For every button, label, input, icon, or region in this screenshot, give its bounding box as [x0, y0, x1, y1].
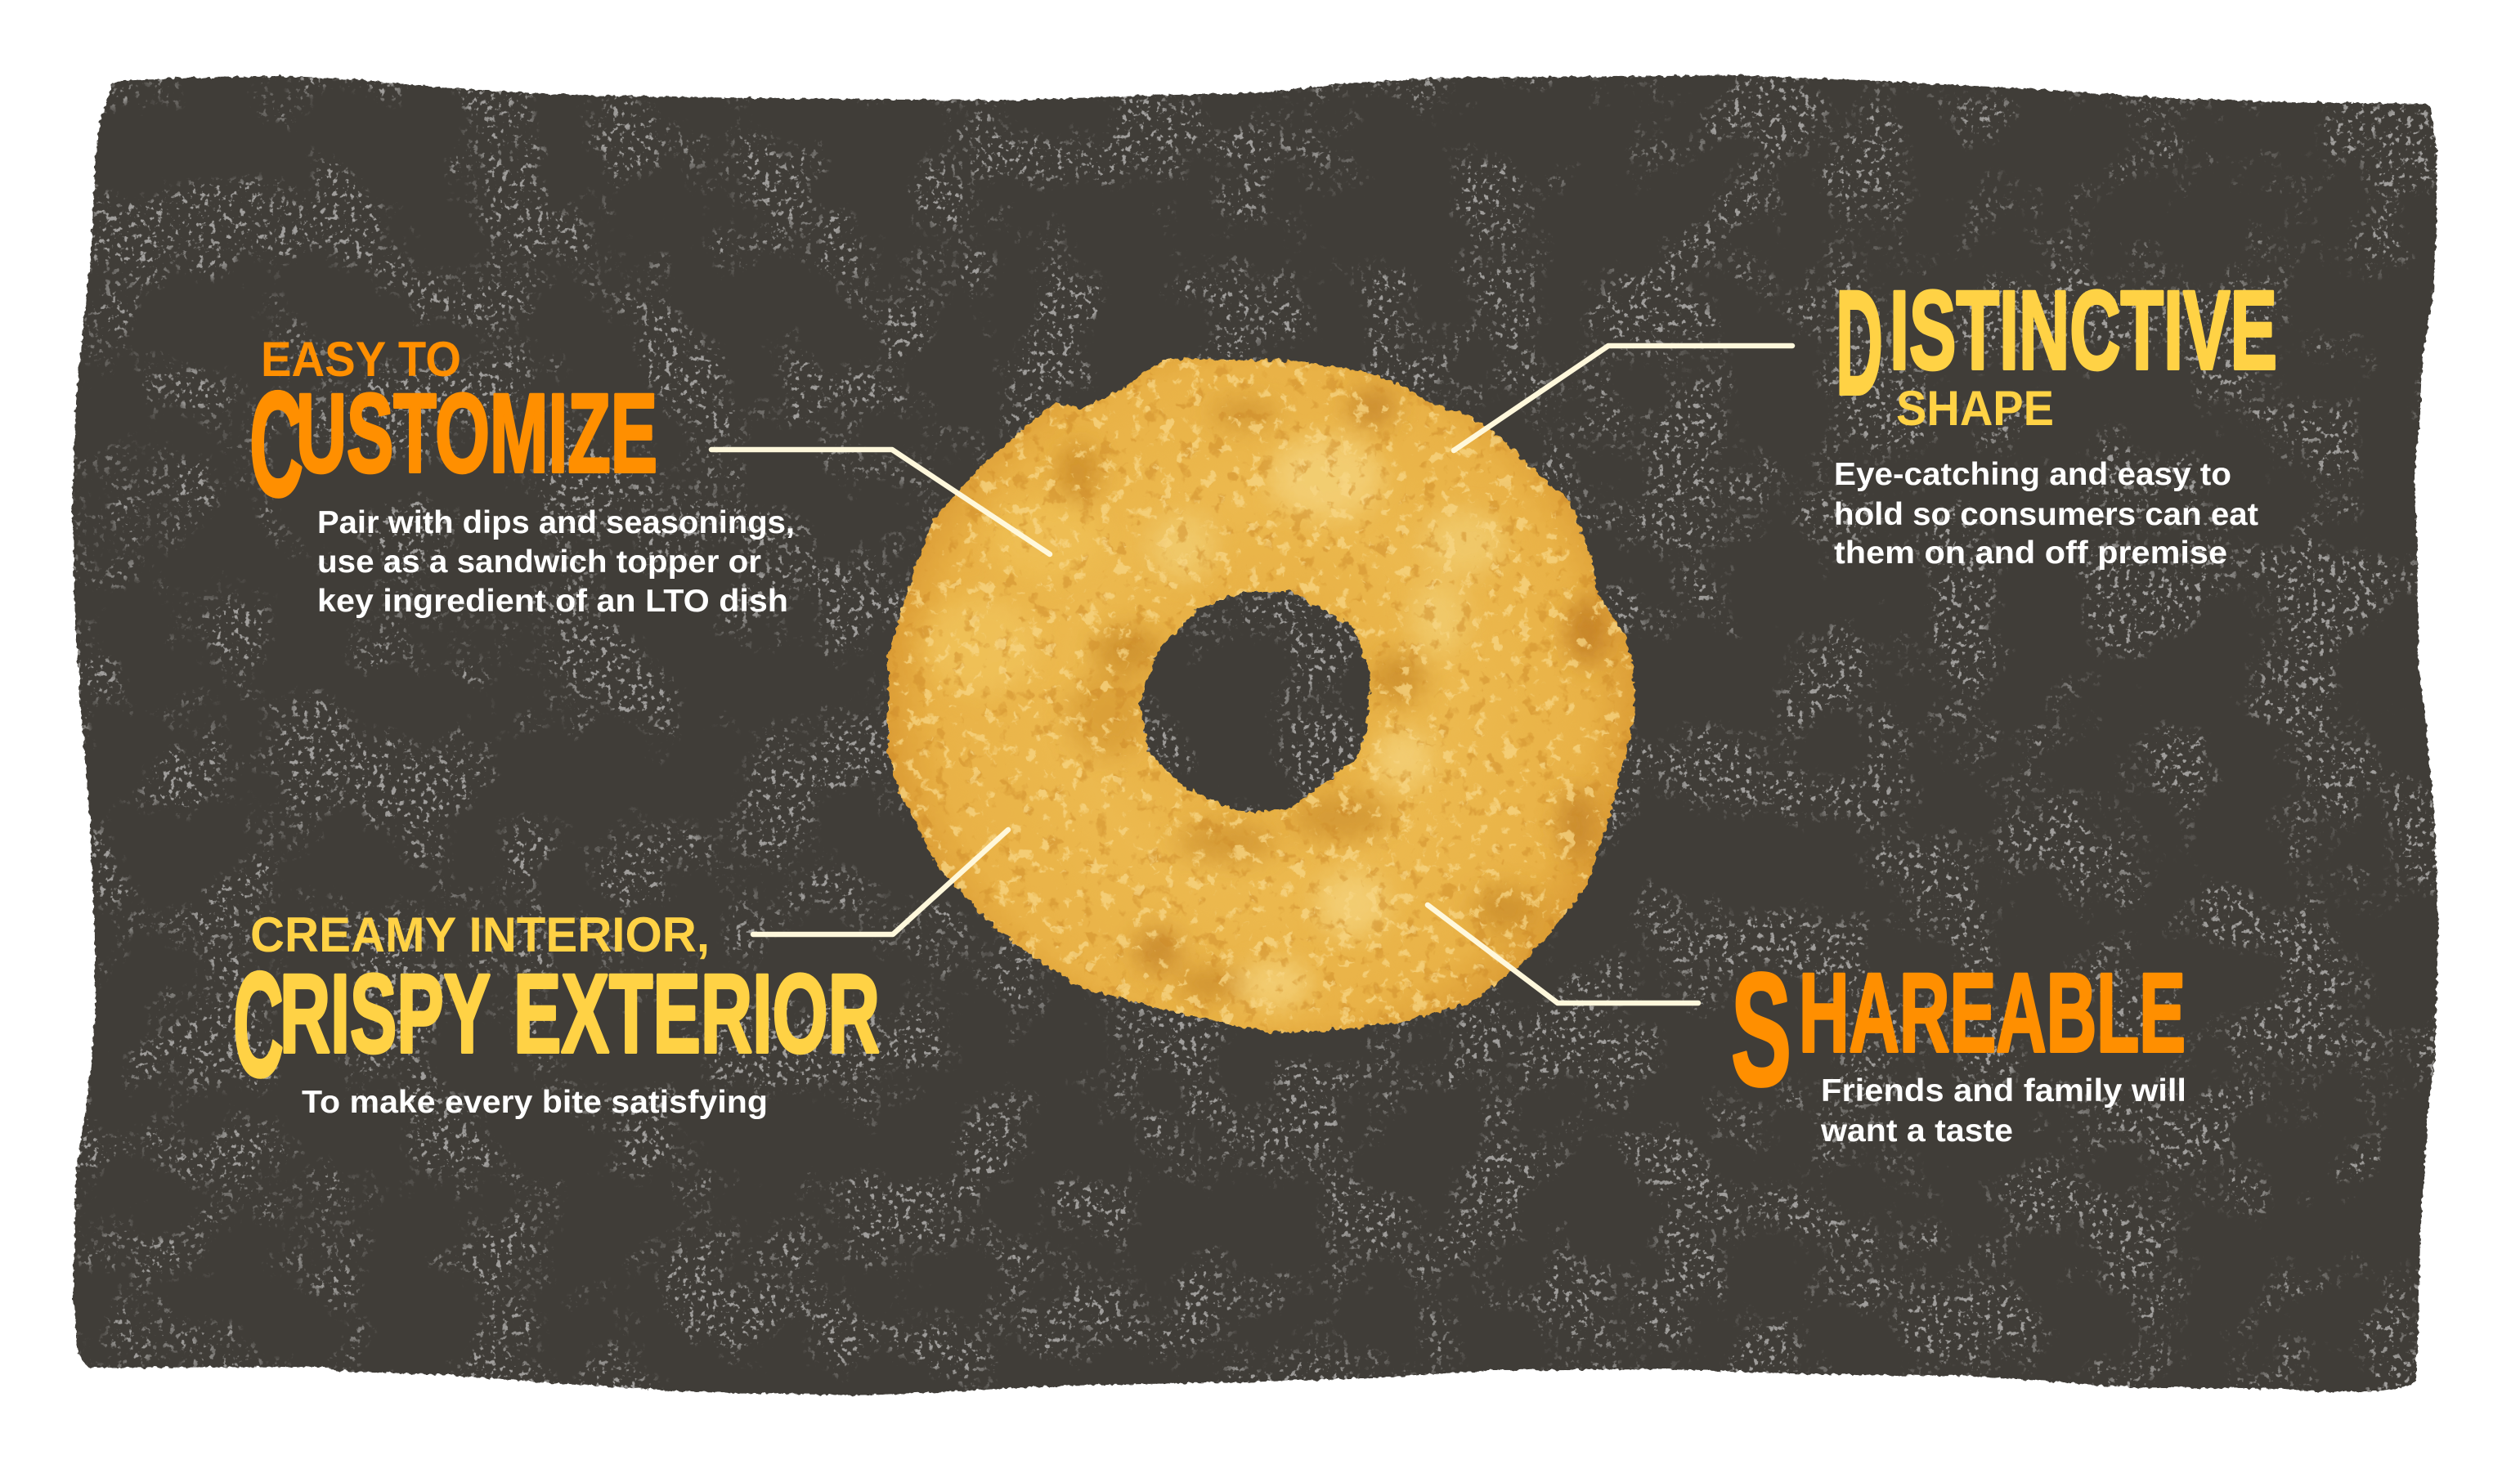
leader line: creamy interior — [753, 830, 1008, 934]
text: shareable description — [1820, 1073, 2186, 1149]
text: customize description: key ingredient of an LTO dish — [317, 584, 788, 619]
heading: shareable: HAREABLE — [1799, 951, 2186, 1076]
text: shareable description: Friends and family will — [1821, 1073, 2186, 1108]
text: distinctive description — [1834, 457, 2258, 571]
text: distinctive description: Eye-catching and easy to — [1834, 457, 2231, 492]
heading: creamy interior crispy exterior: CREAMY INTERIOR, — [250, 907, 710, 962]
text: creamy description: To make every bite satisfying — [302, 1085, 768, 1120]
text: customize description: use as a sandwich topper or — [317, 544, 761, 580]
text: customize description: Pair with dips and seasonings, — [317, 505, 795, 540]
heading: easy to customize: EASY TO — [261, 332, 461, 387]
text: shareable description: want a taste — [1820, 1113, 2013, 1149]
text: distinctive description: them on and off premise — [1834, 535, 2227, 571]
heading: shareable — [1731, 940, 2186, 1119]
image: crispy potato ring — [875, 343, 1652, 1046]
heading: creamy interior crispy exterior — [233, 907, 880, 1108]
text: customize description — [317, 505, 795, 619]
heading: distinctive shape — [1836, 259, 2277, 436]
callout: shareable — [1731, 940, 2186, 1149]
heading: easy to customize: C — [249, 361, 303, 527]
heading: easy to customize — [249, 332, 657, 527]
leader line: shareable — [1428, 905, 1698, 1003]
callout: distinctive shape — [1834, 259, 2277, 571]
heading: easy to customize: USTOMIZE — [296, 371, 657, 496]
heading: distinctive shape: ISTINCTIVE — [1890, 268, 2277, 393]
heading: creamy interior crispy exterior: EXTERIOR — [513, 952, 880, 1077]
heading: distinctive shape: D — [1836, 259, 1883, 426]
heading: distinctive shape: SHAPE — [1896, 381, 2054, 436]
callout: creamy interior crispy exterior — [233, 907, 880, 1120]
heading: creamy interior crispy exterior: C — [233, 941, 284, 1108]
leader line: distinctive shape — [1454, 346, 1792, 450]
callout: easy to customize — [249, 332, 795, 619]
text: distinctive description: hold so consumers can eat — [1834, 497, 2258, 532]
heading: creamy interior crispy exterior: RISPY — [280, 952, 491, 1077]
heading: shareable: S — [1731, 940, 1791, 1119]
leader line: easy to customize — [711, 450, 1050, 554]
